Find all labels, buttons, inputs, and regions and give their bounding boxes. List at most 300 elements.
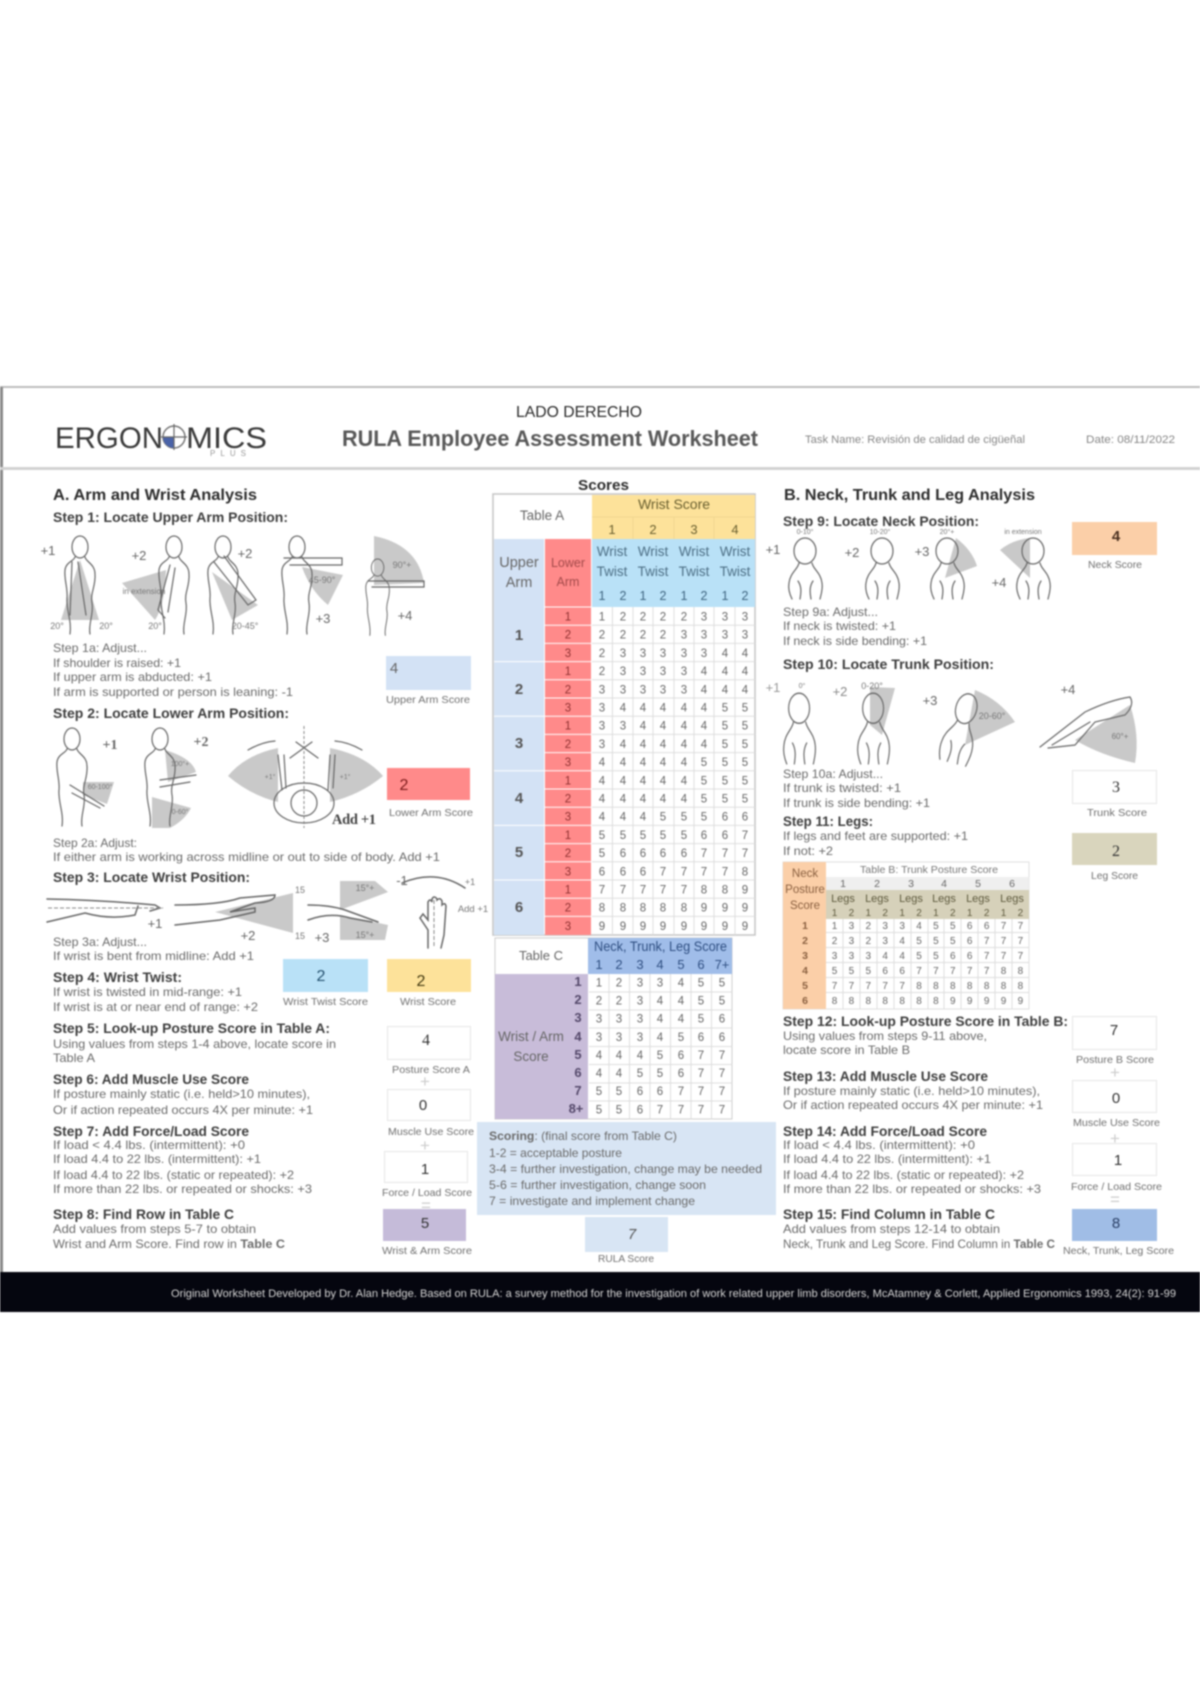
table B: 2 [874, 878, 880, 890]
figures: wrist positions: Add +1 [458, 904, 488, 915]
table A: 23333344 [599, 648, 749, 660]
figures: lower arm positions [57, 726, 383, 828]
table C: Score [513, 1049, 549, 1064]
figures: neck positions: +2 [845, 545, 859, 560]
step 10a adjustments [783, 767, 930, 810]
wrist twist score [283, 959, 368, 1008]
upper arm score: Upper Arm Score [386, 694, 470, 706]
table C: 4455677 [596, 1068, 725, 1080]
table B: 6 [802, 995, 808, 1007]
step 10 heading: Step 10: Locate Trunk Position: [783, 656, 994, 672]
neck score: 4 [1112, 528, 1121, 545]
table A: 3 [565, 866, 571, 878]
table C: 3 [574, 1010, 582, 1025]
step 15 [783, 1206, 1055, 1251]
table C: 2234455 [596, 996, 725, 1008]
table C: 5 [677, 957, 685, 972]
step 5: Using values from steps 1-4 above, locate score in [53, 1037, 336, 1051]
figures: wrist positions [47, 873, 488, 948]
table A: 33444455 [599, 721, 748, 733]
figures: upper arm positions [41, 536, 424, 635]
step 10a adjustments: If trunk is twisted: +1 [783, 781, 901, 795]
table B: Legs [966, 893, 990, 905]
table C: 1 [574, 974, 582, 989]
step 15: Neck, Trunk and Leg Score. Find Column in Table C [783, 1237, 1055, 1251]
table A: Wrist [720, 544, 750, 559]
posture score A: 4 [422, 1032, 430, 1049]
step 14: If load < 4.4 lbs. (intermittent): +0 [783, 1138, 975, 1152]
figures: upper arm positions: +4 [398, 608, 412, 623]
table A: Upper [499, 555, 539, 571]
posture score A: Posture Score A [392, 1064, 470, 1076]
table A: 1 [565, 775, 571, 787]
table B: 555667777788 [832, 966, 1024, 977]
figures: lower arm positions: Add +1 [332, 812, 376, 828]
step 11 legs: If not: +2 [783, 844, 833, 858]
table B: 5 [975, 878, 981, 890]
step 6: If posture mainly static (i.e. held>10 minutes), [53, 1087, 310, 1101]
table A: 33333444 [599, 684, 749, 696]
figures: neck positions: +3 [915, 544, 929, 559]
table B: Posture [785, 884, 825, 896]
step 12: Using values from steps 9-11 above, [783, 1029, 987, 1043]
RULA score: 7 [628, 1226, 637, 1243]
table A: Twist [597, 564, 628, 579]
step 1a adjustments [53, 641, 293, 699]
table A: 66677778 [599, 866, 748, 878]
table A: 6 [515, 899, 523, 916]
table A: 3 [565, 702, 571, 714]
force load score: Force / Load Score [1071, 1181, 1162, 1193]
table A: Table A [520, 508, 564, 523]
figures: trunk positions: 0-20° [861, 681, 883, 691]
muscle use score [1072, 1080, 1160, 1129]
figures: trunk positions [766, 680, 1137, 767]
table C: 3334566 [596, 1032, 725, 1044]
table B: 4 [941, 878, 947, 890]
trunk score [1072, 770, 1156, 819]
table A: Arm [506, 575, 532, 591]
leg score: Leg Score [1091, 870, 1138, 882]
table A: 2 [565, 848, 571, 860]
table C: 5566777 [596, 1086, 725, 1098]
table B: 5 [802, 980, 808, 992]
table A: 56666777 [599, 848, 748, 860]
step 8 [53, 1206, 285, 1251]
side label: LADO DERECHO [516, 404, 642, 421]
step 7: Step 7: Add Force/Load Score [53, 1123, 249, 1139]
table B: 1 [840, 878, 846, 890]
table B: Legs [831, 893, 855, 905]
step 14: If more than 22 lbs. or repeated or shocks: +3 [783, 1182, 1041, 1196]
step 7: If load 4.4 to 22 lbs. (intermittent): +1 [53, 1152, 261, 1166]
step 8: Add values from steps 5-7 to obtain [53, 1222, 256, 1236]
step 4 wrist twist: If wrist is twisted in mid-range: +1 [53, 985, 242, 999]
table A: Wrist [679, 544, 709, 559]
table B: 333445566777 [832, 951, 1024, 962]
table A: 44444555 [599, 794, 748, 806]
figures: upper arm positions: +2 [238, 546, 252, 561]
table C: 2 [574, 992, 582, 1007]
table A: 55555667 [599, 830, 748, 842]
heading B: B. Neck, Trunk and Leg Analysis [784, 487, 1035, 504]
muscle use score: Muscle Use Score [1073, 1117, 1160, 1129]
table A: 3 [565, 921, 571, 933]
scoring legend: 3-4 = further investigation, change may be needed [489, 1162, 762, 1176]
figures: trunk positions: 20-60° [979, 711, 1006, 721]
figures: neck positions: 10-20° [870, 528, 891, 536]
table A: 2 [565, 794, 571, 806]
step 14 [783, 1123, 1041, 1196]
figures: trunk positions: +2 [833, 684, 847, 699]
scoring legend: 7 = investigate and implement change [489, 1194, 695, 1208]
force load score [1071, 1144, 1162, 1193]
trunk score: Trunk Score [1087, 807, 1147, 819]
table A: 44444555 [599, 775, 748, 787]
table A: 22223333 [599, 630, 748, 642]
figures: lower arm positions: +1° [340, 773, 351, 781]
table A: 1 [565, 612, 571, 624]
task name: Task Name: Revisión de calidad de cigüeñal [805, 434, 1025, 446]
equals sign: = [421, 1196, 431, 1215]
muscle use score: Muscle Use Score [388, 1126, 474, 1138]
figures: upper arm positions: +3 [316, 611, 330, 626]
posture score A [388, 1026, 470, 1076]
step 7: If load < 4.4 lbs. (intermittent): +0 [53, 1138, 245, 1152]
wrist twist score: Wrist Twist Score [283, 996, 368, 1008]
figures: upper arm positions: +2 [132, 548, 146, 563]
table C: Wrist / Arm [498, 1029, 564, 1044]
table A: 2 [565, 739, 571, 751]
table A: 99999999 [599, 921, 748, 933]
table B: 4 [802, 965, 808, 977]
force load score: Force / Load Score [382, 1187, 472, 1199]
step 15: Add values from steps 12-14 to obtain [783, 1222, 1000, 1236]
leg score [1072, 833, 1157, 882]
step 4 wrist twist: Step 4: Wrist Twist: [53, 969, 182, 985]
table B: 888888899999 [832, 996, 1024, 1007]
panel: B. neck, trunk and leg analysis [766, 487, 1174, 1257]
table A: 4 [731, 522, 739, 537]
lower arm score [387, 768, 473, 819]
figures: upper arm positions: 45-90° [309, 575, 336, 585]
step 13: Or if action repeated occurs 4X per minute: +1 [783, 1098, 1043, 1112]
figures: upper arm positions: 20° [99, 621, 113, 631]
figures: upper arm positions: in extension [123, 587, 165, 596]
table A: 3 [565, 812, 571, 824]
figures: upper arm positions: 20° [50, 621, 64, 631]
table A: Lower [551, 556, 585, 570]
table B: Legs [932, 893, 956, 905]
table B: 3 [802, 950, 808, 962]
step 4 wrist twist: If wrist is at or near end of range: +2 [53, 1000, 258, 1014]
figures: wrist positions: +3 [315, 930, 329, 945]
lower arm score: Lower Arm Score [389, 807, 473, 819]
step 12: locate score in Table B [783, 1043, 910, 1057]
figures: upper arm positions: 90°+ [393, 560, 411, 570]
step 9a adjustments: If neck is twisted: +1 [783, 619, 896, 633]
wrist twist score: 2 [317, 968, 326, 985]
figures: wrist positions: 15°+ [356, 930, 374, 940]
figures: wrist positions: 15 [295, 931, 305, 941]
figures: neck positions: +4 [992, 575, 1006, 590]
figures: neck positions: in extension [1004, 529, 1042, 536]
footer: Original Worksheet Developed by Dr. Alan Hedge. Based on RULA: a survey method for the investigation of work related upper limb disorders, McAtamney & Corlett, Applied Ergonomics 1993, 24(2): 91-99 [171, 1288, 1176, 1300]
table C: 3 [636, 957, 644, 972]
posture B score: 7 [1110, 1022, 1118, 1039]
footer [0, 1272, 1200, 1312]
neck trunk leg score: Neck, Trunk, Leg Score [1063, 1245, 1174, 1257]
figures: neck positions: 0-10° [797, 528, 814, 536]
figures: trunk positions: +1 [766, 680, 780, 695]
step 9a adjustments [783, 605, 927, 648]
scoring legend: 5-6 = further investigation, change soon [489, 1178, 706, 1192]
table B: Legs [1000, 893, 1024, 905]
step 11 legs: Step 11: Legs: [783, 813, 873, 829]
force load score: 1 [1114, 1152, 1122, 1169]
step 4 wrist twist [53, 969, 258, 1014]
logo: Ergonomics Plus: MICS [186, 422, 267, 455]
panel: A. arm and wrist analysis [41, 487, 488, 1257]
force load score [382, 1152, 472, 1199]
wrist and arm score [382, 1209, 472, 1257]
table C: 7+ [715, 957, 729, 972]
step 3 heading: Step 3: Locate Wrist Position: [53, 869, 250, 885]
table A: Arm [557, 575, 579, 589]
leg score: 2 [1112, 843, 1120, 860]
step 9a adjustments: If neck is side bending: +1 [783, 634, 927, 648]
step 5 [53, 1020, 336, 1065]
figures: wrist positions: +1 [465, 877, 475, 887]
step 6 [53, 1071, 313, 1117]
step 12 [783, 1013, 1068, 1057]
figures: wrist positions: +2 [241, 928, 255, 943]
table B [783, 862, 1029, 1009]
table C: 5567777 [596, 1104, 725, 1116]
lower arm score: 2 [400, 777, 409, 794]
step 2a adjustments: If either arm is working across midline or out to side of body. Add +1 [53, 850, 440, 864]
plus sign: + [1110, 1063, 1120, 1082]
table A: 34444455 [599, 739, 748, 751]
table A: 2 [649, 522, 657, 537]
step 8: Step 8: Find Row in Table C [53, 1206, 234, 1222]
figures: wrist positions: 15 [295, 885, 305, 895]
step 1 heading: Step 1: Locate Upper Arm Position: [53, 509, 288, 525]
table A: 88888999 [599, 903, 748, 915]
table C: 4445677 [596, 1050, 725, 1062]
table A [493, 494, 755, 935]
heading A: A. Arm and Wrist Analysis [53, 487, 257, 504]
RULA score [585, 1217, 668, 1265]
upper arm score [386, 656, 471, 706]
muscle use score: 0 [419, 1097, 427, 1114]
step 13: If posture mainly static (i.e. held>10 minutes), [783, 1084, 1040, 1098]
figures: lower arm positions: 0-60° [172, 808, 189, 816]
figures: trunk positions: 0° [799, 682, 806, 690]
step 1a adjustments: Step 1a: Adjust... [53, 641, 147, 655]
figures: neck positions [766, 528, 1050, 599]
step 5: Step 5: Look-up Posture Score in Table A: [53, 1020, 330, 1036]
logo: Ergonomics Plus [55, 422, 267, 458]
table B: Table B: Trunk Posture Score [860, 864, 998, 876]
figures: lower arm positions: 100°+ [171, 760, 189, 768]
table B: Legs [899, 893, 923, 905]
table A: 3 [690, 522, 698, 537]
table B: 3 [908, 878, 914, 890]
table A: Twist [679, 564, 710, 579]
step 3a adjustments: If wrist is bent from midline: Add +1 [53, 949, 254, 963]
table C: 4 [656, 957, 664, 972]
table A: 1 [565, 830, 571, 842]
table A: 12121212 [599, 589, 749, 603]
table A: 2 [515, 681, 523, 698]
step 2a adjustments [53, 836, 440, 864]
figures: lower arm positions: +1 [103, 738, 117, 753]
table B: 121212121212 [832, 908, 1024, 919]
table A: Wrist [597, 544, 627, 559]
figures: upper arm positions: 20-45° [232, 621, 259, 631]
figures: upper arm positions: 20° [148, 621, 162, 631]
figures: upper arm positions: +1 [41, 543, 55, 558]
step 3a adjustments: Step 3a: Adjust... [53, 935, 147, 949]
step 15: Step 15: Find Column in Table C [783, 1206, 995, 1222]
table A: Twist [638, 564, 669, 579]
step 2 heading: Step 2: Locate Lower Arm Position: [53, 705, 289, 721]
table C: 6 [574, 1065, 582, 1080]
upper arm score: 4 [390, 660, 398, 677]
table A: 3 [565, 757, 571, 769]
wrist score: Wrist Score [400, 996, 456, 1008]
table C: 7 [574, 1083, 582, 1098]
neck score: Neck Score [1088, 559, 1142, 571]
step 14: Step 14: Add Force/Load Score [783, 1123, 987, 1139]
step 7: If more than 22 lbs. or repeated or shocks: +3 [53, 1182, 312, 1196]
table A: 1 [565, 884, 571, 896]
logo: Ergonomics Plus: ERGON [55, 422, 163, 455]
table A: 1 [565, 666, 571, 678]
posture B score [1072, 1016, 1156, 1066]
muscle use score: 0 [1112, 1090, 1120, 1107]
figures: wrist positions: -1 [396, 873, 408, 888]
table A: 5 [515, 844, 523, 861]
table C: 8+ [569, 1101, 584, 1116]
table C: 4 [574, 1029, 582, 1044]
neck trunk leg score: 8 [1112, 1215, 1120, 1232]
step 10a adjustments: If trunk is side bending: +1 [783, 796, 930, 810]
RULA score: RULA Score [598, 1253, 654, 1265]
step 3a adjustments [53, 935, 254, 963]
figures: wrist positions: +1 [148, 916, 162, 931]
trunk score: 3 [1112, 779, 1120, 796]
step 6: Step 6: Add Muscle Use Score [53, 1071, 249, 1087]
table B: 132334556677 [832, 921, 1024, 932]
table A: 23333444 [599, 666, 749, 678]
table C: 1233455 [596, 978, 725, 990]
wrist score: 2 [417, 973, 426, 990]
step 13: Step 13: Add Muscle Use Score [783, 1068, 988, 1084]
table A: Wrist [638, 544, 668, 559]
table C: 1 [595, 957, 603, 972]
neck score [1072, 522, 1157, 571]
step 11 legs [783, 813, 968, 858]
plus sign: + [1110, 1129, 1120, 1148]
table A: 44444555 [599, 757, 748, 769]
figures: lower arm positions: +2 [194, 735, 208, 750]
step 1a adjustments: If arm is supported or person is leaning: -1 [53, 685, 293, 699]
step 7 [53, 1123, 312, 1196]
table A: 1 [565, 721, 571, 733]
muscle use score [388, 1090, 474, 1138]
scores heading: Scores [578, 477, 629, 494]
wrist and arm score: Wrist & Arm Score [382, 1245, 472, 1257]
step 13 [783, 1068, 1043, 1112]
figures: neck positions: +1 [766, 542, 780, 557]
step 5: Table A [53, 1051, 95, 1065]
table B: 6 [1009, 878, 1015, 890]
table B: 1 [802, 920, 808, 932]
table B: 2 [802, 935, 808, 947]
table A: 77777889 [599, 884, 748, 896]
step 12: Step 12: Look-up Posture Score in Table B: [783, 1013, 1068, 1029]
table A: 34444455 [599, 702, 748, 714]
logo: Ergonomics Plus: PLUS [210, 449, 246, 458]
plus sign: + [420, 1136, 430, 1155]
step 1a adjustments: If shoulder is raised: +1 [53, 656, 181, 670]
step 10a adjustments: Step 10a: Adjust... [783, 767, 883, 781]
scoring legend: Scoring: (final score from Table C) [489, 1129, 677, 1143]
table A: 4 [515, 790, 524, 807]
posture B score: Posture B Score [1076, 1054, 1154, 1066]
table A: 2 [565, 903, 571, 915]
step 7: If load 4.4 to 22 lbs. (static or repeated): +2 [53, 1168, 294, 1182]
figures: lower arm positions: 60-100° [88, 783, 112, 791]
figures: trunk positions: 60°+ [1112, 732, 1129, 741]
step 2a adjustments: Step 2a: Adjust: [53, 836, 137, 850]
scoring legend: 1-2 = acceptable posture [489, 1146, 622, 1160]
table B: Legs [865, 893, 889, 905]
date: Date: 08/11/2022 [1086, 434, 1175, 446]
table C: Table C [519, 948, 563, 963]
table C: 2 [615, 957, 623, 972]
title: RULA Employee Assessment Worksheet [342, 426, 759, 451]
table A: Wrist Score [638, 496, 710, 512]
step 8: Wrist and Arm Score. Find row in Table C [53, 1237, 285, 1251]
header [55, 404, 1175, 458]
step 9a adjustments: Step 9a: Adjust... [783, 605, 878, 619]
step 11 legs: If legs and feet are supported: +1 [783, 829, 968, 843]
scoring legend [477, 1122, 776, 1215]
table A: Twist [720, 564, 751, 579]
neck trunk leg score [1063, 1209, 1174, 1257]
figures: neck positions: 20°+ [940, 528, 954, 536]
figures: trunk positions: +4 [1061, 682, 1075, 697]
figures: lower arm positions: +1° [265, 773, 276, 781]
step 9 heading: Step 9: Locate Neck Position: [783, 513, 979, 529]
step 14: If load 4.4 to 22 lbs. (static or repeated): +2 [783, 1168, 1024, 1182]
table A: 2 [565, 684, 571, 696]
figures: trunk positions: +3 [923, 693, 937, 708]
table C: 3334456 [596, 1014, 725, 1026]
table A: 1 [608, 522, 616, 537]
step 1a adjustments: If upper arm is abducted: +1 [53, 670, 212, 684]
wrist and arm score: 5 [421, 1215, 429, 1232]
table A: 3 [515, 735, 523, 752]
table C: 5 [574, 1047, 582, 1062]
step 6: Or if action repeated occurs 4X per minute: +1 [53, 1103, 313, 1117]
table A: 2 [565, 630, 571, 642]
table A: 1 [515, 627, 523, 644]
table B: Score [790, 900, 820, 912]
